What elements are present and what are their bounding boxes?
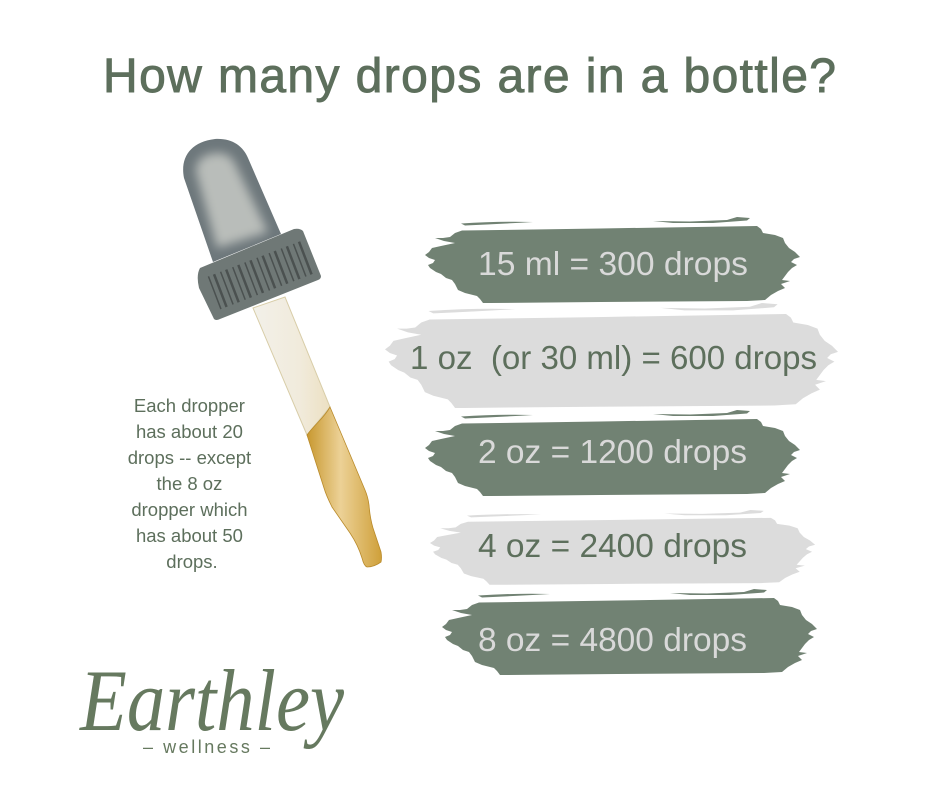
side note: Each dropper <box>134 395 245 416</box>
logo script: Earthley <box>78 653 345 750</box>
icon: dropper <box>183 139 382 567</box>
side note: drops. <box>166 551 218 572</box>
row: 1 oz <box>385 303 838 408</box>
side note: has about 50 <box>136 525 243 546</box>
side note: dropper which <box>131 499 248 520</box>
row: 8 oz: 8 oz = 4800 drops <box>478 621 747 658</box>
side note: has about 20 <box>136 421 243 442</box>
side note: the 8 oz <box>157 473 222 494</box>
side note: drops -- except <box>128 447 251 468</box>
dropper oil <box>307 407 382 567</box>
dropper glass tube <box>253 297 330 435</box>
title: How many drops are in a bottle? <box>103 50 836 103</box>
row: 4 oz <box>430 510 815 585</box>
dropper cap ribs <box>214 257 308 293</box>
row: 8 oz <box>442 589 817 675</box>
row: 2 oz: 2 oz = 1200 drops <box>478 433 747 470</box>
dropper cap <box>198 229 321 320</box>
row: 15 ml: 15 ml = 300 drops <box>478 245 748 282</box>
row: 2 oz <box>425 410 800 496</box>
row: 4 oz: 4 oz = 2400 drops <box>478 527 747 564</box>
row: 15 ml <box>425 217 800 303</box>
dropper bulb <box>183 139 281 262</box>
logo subtitle: – wellness – <box>143 737 270 757</box>
logo <box>78 653 345 757</box>
row: 1 oz: 1 oz (or 30 ml) = 600 drops <box>410 339 817 376</box>
